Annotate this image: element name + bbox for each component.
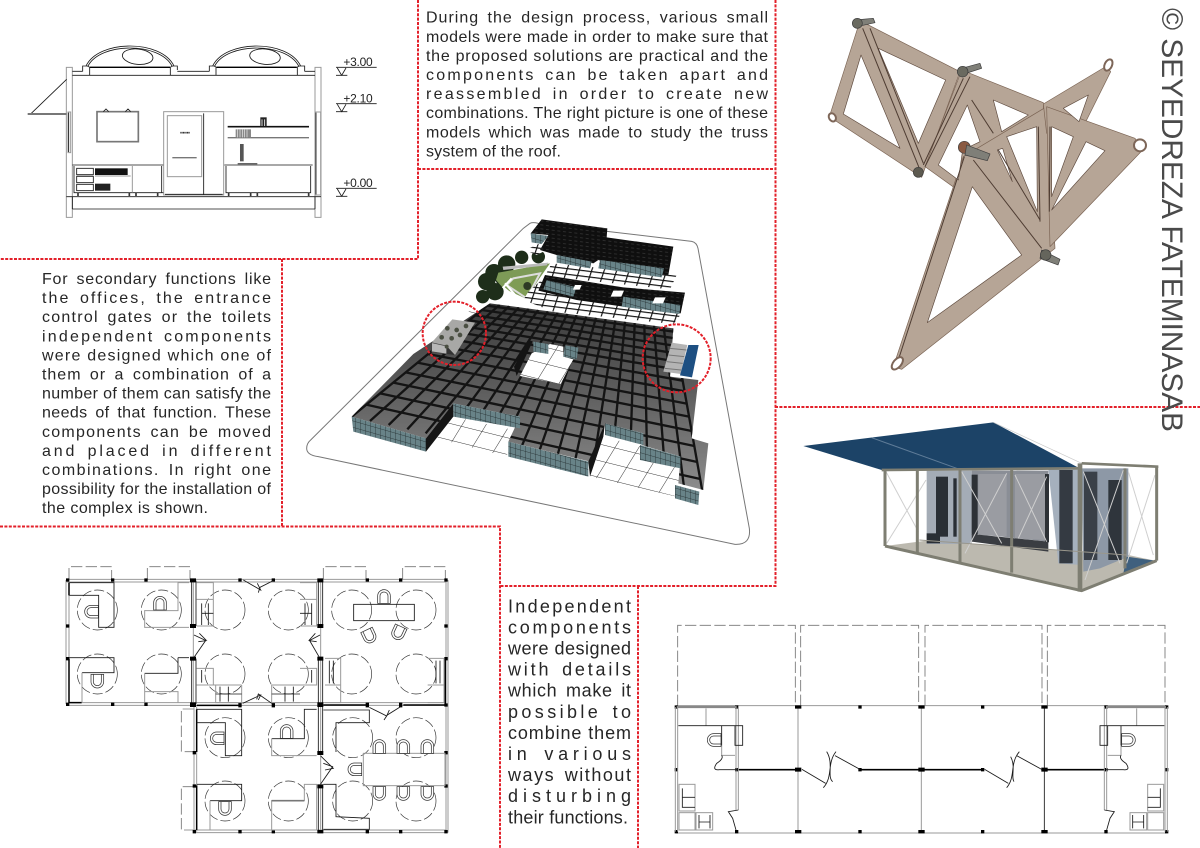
lower white grid courts — [437, 307, 681, 497]
text block: secondary functions: number of them can satisfy the — [42, 386, 271, 403]
truss model photo — [827, 18, 1146, 372]
text block: independent components: components — [508, 617, 631, 637]
text block: design process: During the design process, various small — [426, 10, 768, 27]
text block: secondary functions: combinations. In right one — [42, 462, 271, 479]
text block: secondary functions: For secondary functions like — [42, 271, 271, 288]
right office component — [1100, 707, 1167, 832]
level mark +0.00 — [336, 176, 377, 196]
level mark +2.10 — [336, 91, 377, 112]
cross bracing — [886, 470, 1155, 580]
text block: design process: models which was made to study the truss — [426, 124, 768, 141]
text block: independent components: which make it — [507, 681, 631, 701]
large meeting room lower right — [323, 710, 445, 829]
blue roof — [803, 422, 1082, 470]
text block: independent components: disturbing — [508, 786, 631, 806]
columns — [675, 705, 1168, 833]
floor — [885, 541, 1155, 591]
text block: secondary functions: needs of that function. These — [42, 405, 271, 422]
text block: design process: reassembled in order to create new — [426, 86, 768, 103]
text block: secondary functions: the offices, the entrance — [42, 290, 271, 307]
courtyard — [514, 340, 578, 384]
section: picture frame — [97, 109, 138, 142]
wooden truss silhouettes — [829, 21, 1143, 369]
steel frame — [882, 463, 1158, 592]
text block: secondary functions: independent components — [42, 328, 271, 345]
upper white grid strips — [523, 243, 682, 324]
text block: design process: the proposed solutions are practical and the — [426, 48, 768, 65]
text block: design process — [426, 10, 769, 160]
dashed circulation circles — [77, 590, 436, 821]
text block: independent components: in various — [508, 744, 631, 764]
text block: secondary functions: and placed in different — [42, 443, 272, 460]
section: roof vaults — [83, 46, 305, 75]
site boundary — [307, 223, 750, 544]
section: left cabinet — [72, 165, 163, 196]
truss seams — [863, 28, 1050, 365]
text block: design process: components can be taken apart and — [426, 67, 768, 84]
text block: design process: system of the roof. — [426, 143, 561, 160]
text block: independent components: with details — [507, 660, 631, 680]
double doors — [802, 752, 1042, 788]
text block: secondary functions: components can be moved — [42, 424, 271, 441]
text block: independent components: combine them — [508, 723, 631, 743]
truss openings — [843, 48, 1105, 323]
red highlight circle left — [423, 302, 486, 365]
glazed walls — [352, 403, 699, 505]
left office component — [675, 707, 743, 832]
office desks upper left — [69, 583, 189, 703]
main roof with grid — [352, 303, 708, 497]
plan outer and partition walls — [66, 579, 448, 833]
outer walls and bays — [676, 706, 1167, 833]
text block: independent components: Independent — [508, 596, 631, 616]
garden and trees — [476, 250, 550, 303]
text block: secondary functions: them or a combination of a — [42, 366, 271, 384]
highlighted component left — [432, 319, 475, 355]
section: awning — [28, 79, 67, 114]
text block: independent components: their functions. — [508, 807, 628, 827]
text block: independent components: ways without — [507, 765, 631, 785]
text block: secondary functions: control gates or the toilets — [42, 309, 271, 326]
site model — [307, 219, 750, 544]
dashed canopy outline — [678, 625, 1165, 706]
reception shelves upper middle — [197, 583, 317, 703]
eye lugs — [827, 58, 1146, 372]
level mark +0.00: +0.00 — [343, 176, 373, 190]
blue floor corner — [1123, 557, 1155, 573]
text block: independent components: were designed — [507, 638, 631, 658]
highlighted component right — [663, 343, 699, 377]
section: right counter and shelves — [224, 117, 313, 196]
structural columns — [66, 578, 448, 833]
pavilion render — [803, 422, 1158, 592]
bolts — [852, 18, 1060, 265]
text block: secondary functions: the complex is shown. — [42, 500, 208, 517]
interior components — [927, 468, 1128, 572]
red highlight circle right — [643, 324, 711, 392]
meeting room upper right — [325, 590, 444, 703]
section: shell walls, ceiling and floor — [66, 67, 321, 217]
dashed porches — [69, 567, 445, 830]
upper dark roof blocks — [531, 219, 685, 314]
text block: design process: combinations. The right picture is one of these — [426, 105, 768, 122]
text block: secondary functions — [41, 271, 272, 517]
level mark +2.10: +2.10 — [343, 91, 373, 105]
copyright vertical credit: © SEYEDREZA FATEMINASAB — [1155, 8, 1188, 432]
floor plan: long component row — [675, 625, 1168, 833]
text block: independent components: possible to — [508, 702, 631, 722]
text block: secondary functions: were designed which one of — [41, 347, 272, 364]
floor plan: complex of offices — [66, 567, 448, 833]
level mark +3.00 — [336, 55, 377, 75]
text block: design process: models were made in order to make sure that — [426, 29, 769, 46]
section drawing with level marks — [28, 46, 377, 217]
door swings — [194, 580, 401, 784]
level mark +3.00: +3.00 — [343, 55, 373, 69]
section: door unit — [164, 112, 224, 195]
office desks lower middle — [197, 709, 317, 830]
text block: secondary functions: possibility for the installation of — [42, 481, 272, 498]
text block: independent components — [507, 596, 631, 827]
